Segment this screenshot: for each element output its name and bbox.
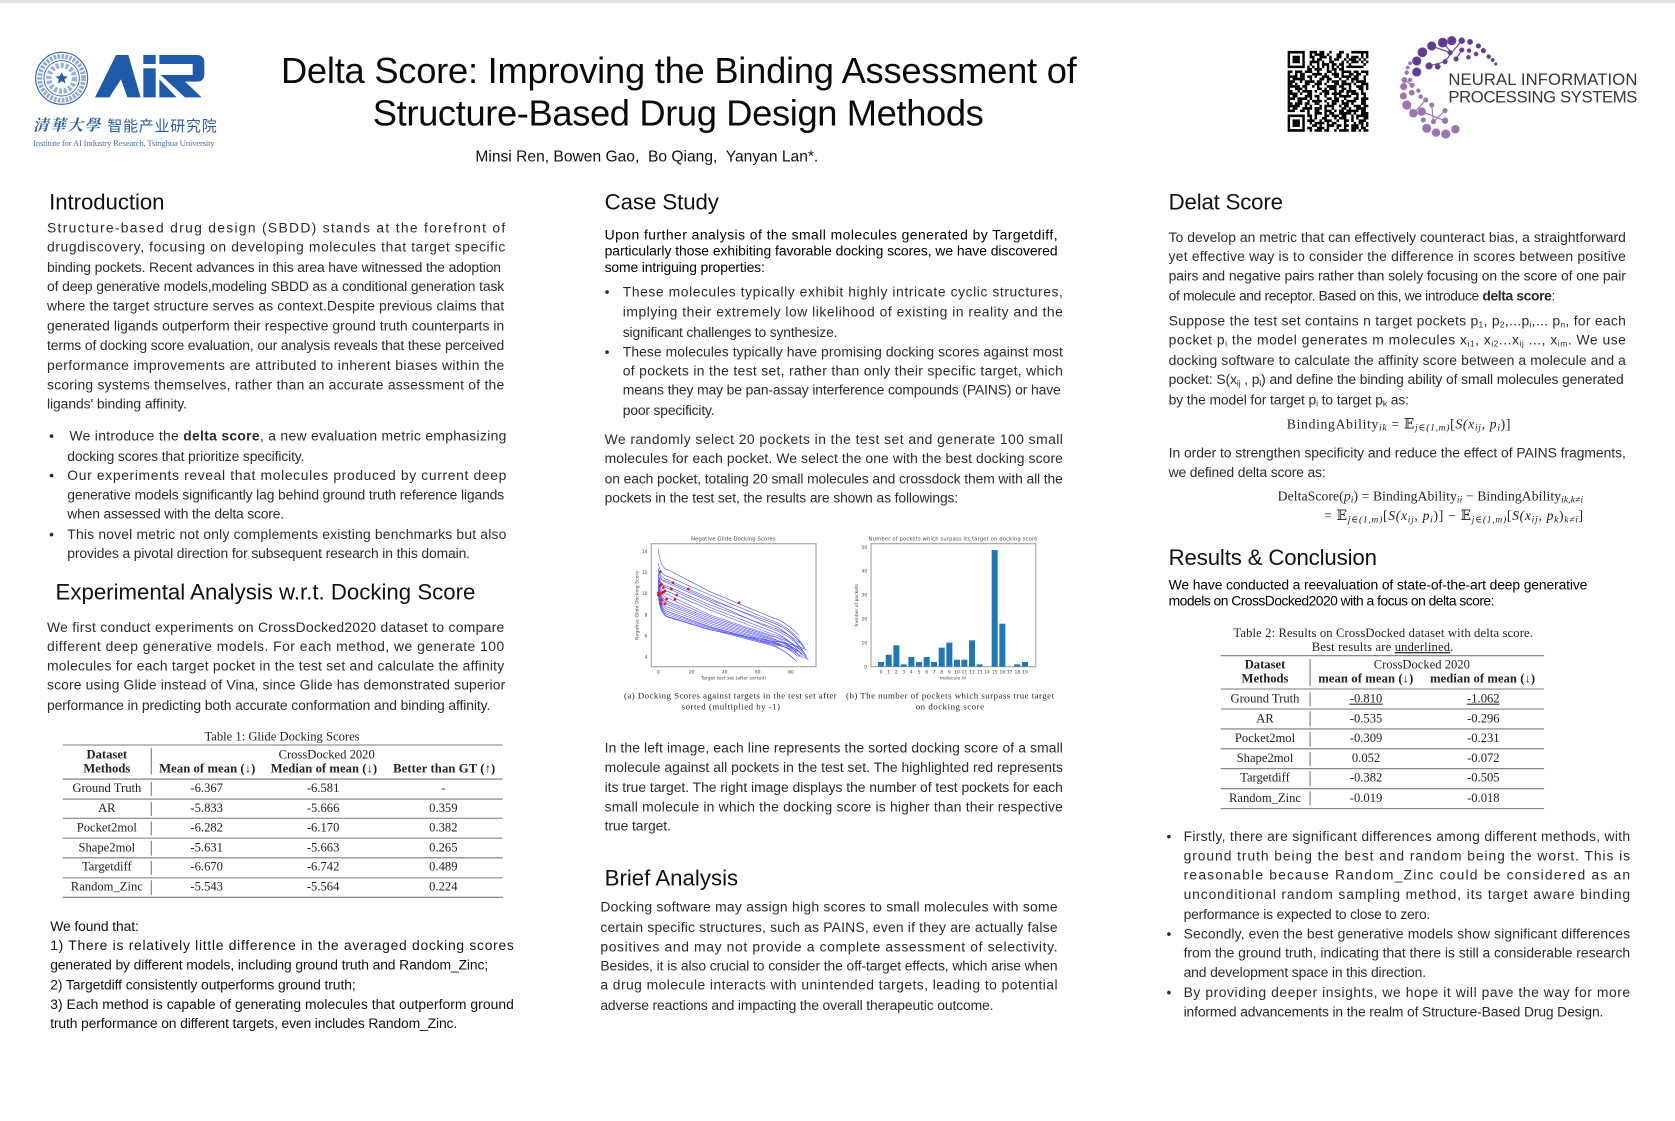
text block: introduction paragraph: binding pockets. Recent advances in this area have witnessed the adoption: [47, 259, 501, 275]
text block: problem definition: ij: [1237, 378, 1241, 388]
text block: findings: 3) Each method is capable of generating molecules that outperform ground: [50, 996, 514, 1012]
line chart: negative glide docking scores: Negative Glide Docking Scores: [691, 537, 776, 543]
text block: problem definition: ...x: [1499, 332, 1519, 348]
formula: delta score: ik,k≠i: [1561, 495, 1583, 506]
table 2: delta score results: mean of mean (↓): [1318, 672, 1413, 686]
bullet list: conclusions: •: [1167, 984, 1172, 1000]
table 1: glide docking scores: 0.359: [429, 801, 457, 815]
bullet list: conclusions: Secondly, even the best generative models show significant differences: [1184, 925, 1630, 941]
bullet list: contributions: generative models significantly lag behind ground truth reference ligands: [67, 486, 504, 502]
panel: experimental analysis: [47, 579, 514, 1031]
text block: brief analysis: adverse reactions and impacting the overall therapeutic outcome.: [600, 997, 993, 1013]
line chart: negative glide docking scores: 14: [642, 549, 648, 555]
heading: delta score: Delat Score: [1169, 189, 1283, 214]
bar chart: pockets surpassing target: 10: [954, 670, 960, 676]
bullet list: contributions: This novel metric not only complements existing benchmarks but also: [67, 526, 507, 542]
line chart: negative glide docking scores: 4: [645, 654, 648, 660]
bullet list: conclusions: reasonable because Random_Zinc could be considered as an: [1184, 867, 1630, 883]
formula: binding ability: , p: [1482, 416, 1497, 431]
table 1: glide docking scores: 0.382: [429, 821, 457, 835]
bullet list: molecule properties: implying their extremely low likelihood of existing in reality and the: [623, 304, 1063, 320]
text block: problem definition: 1: [1479, 319, 1484, 329]
table 1: glide docking scores: 0.489: [429, 860, 457, 874]
bullet list: contributions: [49, 428, 507, 561]
bar chart: pockets surpassing target: 3: [902, 670, 905, 676]
text block: problem definition: n: [1560, 319, 1565, 329]
text block: results lead: [1169, 577, 1588, 609]
table 1 caption: Table 1: Glide Docking Scores: [204, 729, 360, 743]
text block: introduction paragraph: of deep generative models,modeling SBDD as a conditional generation task: [47, 278, 504, 294]
formula: delta score: [: [1507, 508, 1512, 523]
text block: findings: 2) Targetdiff consistently outperforms ground truth;: [50, 977, 356, 993]
table 2: delta score results: CrossDocked 2020: [1374, 658, 1470, 672]
text block: delta score motivation: of molecule and receptor. Based on this, we introduce delta score:: [1169, 288, 1555, 304]
text block: findings: 1) There is relatively little difference in the averaged docking scores: [50, 937, 514, 953]
table 1: glide docking scores: -5.833: [190, 801, 223, 815]
line chart: negative glide docking scores: 6: [645, 633, 648, 639]
table 1: glide docking scores: -5.663: [307, 840, 339, 854]
heading: introduction: Introduction: [49, 189, 165, 214]
bar chart: pockets surpassing target: molecule id: [940, 676, 966, 682]
table 2: delta score results: Random_Zinc: [1229, 791, 1301, 805]
text block: delta score intro: In order to strengthen specificity and reduce the effect of PAINS fragments,: [1169, 445, 1626, 461]
formula: delta score: k: [1554, 514, 1559, 525]
bullet list: contributions: docking scores that prioritize specificity.: [67, 448, 304, 464]
chinese institute name: 智能产业研究院: [107, 117, 217, 135]
bar chart: pockets surpassing target: 10: [861, 640, 867, 646]
text block: problem definition: , p: [1484, 312, 1500, 328]
text block: introduction paragraph: drugdiscovery, focusing on developing molecules that target specific: [47, 239, 505, 255]
bullet list: conclusions: informed advancements in the realm of Structure-Based Drug Design.: [1184, 1003, 1603, 1019]
table 1: glide docking scores: Targetdiff: [82, 860, 132, 874]
title: [281, 50, 1078, 134]
text block: problem definition: ,... p: [1532, 312, 1560, 328]
table 2: delta score results: Ground Truth: [1231, 691, 1300, 705]
text block: figure explanation: its true target. The right image displays the number of test pockets for each: [605, 779, 1063, 795]
table 1: glide docking scores: 0.265: [429, 840, 457, 854]
bullet list: conclusions: and development space in this direction.: [1184, 964, 1426, 980]
formula: binding ability: )]: [1501, 416, 1510, 432]
table 2: delta score results: Methods: [1242, 672, 1289, 686]
figure captions: (a) Docking Scores against targets in the test set after: [624, 690, 837, 700]
figure captions: on docking score: [916, 702, 984, 712]
text block: introduction paragraph: scoring systems themselves, rather than an accurate assessment of the: [47, 376, 504, 392]
table 2: delta score results: -0.382: [1350, 771, 1382, 785]
bar chart: pockets surpassing target: 11: [961, 670, 967, 676]
bar chart: pockets surpassing target: 30: [861, 593, 867, 599]
text block: method description: on each pocket, totaling 20 small molecules and crossdock them with all the: [605, 470, 1063, 486]
panel: delta score: [1168, 189, 1626, 525]
table 1: glide docking scores: -6.742: [307, 860, 339, 874]
title: Structure-Based Drug Design Methods: [373, 93, 984, 134]
text block: introduction paragraph: terms of docking score evaluation, our analysis reveals that these perceived: [47, 337, 504, 353]
formula: delta score: S(x: [1388, 508, 1407, 524]
chinese institute name: 清華大學: [33, 113, 102, 135]
bullet list: molecule properties: These molecules typically exhibit highly intricate cyclic structures,: [623, 283, 1063, 299]
bar chart: pockets surpassing target: 12: [969, 670, 975, 676]
bar chart: pockets surpassing target: 18: [1014, 670, 1020, 676]
bullet list: molecule properties: •: [605, 343, 610, 359]
bar chart: pockets surpassing target: 0: [880, 670, 883, 676]
text block: results lead: We have conducted a reevaluation of state-of-the-art deep generative: [1169, 577, 1588, 593]
title: Delta Score: Improving the Binding Assessment of: [281, 50, 1078, 91]
text block: problem definition: pocket: S(x: [1169, 371, 1237, 387]
panel: case study: [605, 189, 1063, 834]
table 1: glide docking scores: AR: [98, 801, 116, 815]
text block: problem definition: pocket p: [1169, 332, 1225, 348]
formula: delta score: i: [1430, 514, 1433, 525]
text block: findings: generated by different models, including ground truth and Random_Zinc;: [50, 956, 488, 972]
text block: problem definition: , for each: [1565, 312, 1626, 328]
bar chart: pockets surpassing target: 16: [999, 670, 1005, 676]
icon: purple dots arc: [1413, 37, 1497, 76]
table 2: delta score results: -0.309: [1350, 731, 1382, 745]
line chart: negative glide docking scores: 40: [722, 670, 728, 676]
formula: binding ability: i: [1497, 422, 1500, 433]
table 2: delta score results: -0.072: [1467, 751, 1500, 765]
bar chart: pockets surpassing target: 13: [977, 670, 983, 676]
bullet list: conclusions: from the ground truth, indicating that there is still a considerable research: [1184, 945, 1630, 961]
text block: experiment description: performance in predicting both accurate conformation and binding affinity.: [47, 697, 490, 713]
QR code: [1288, 52, 1368, 130]
text block: brief analysis: positives and may not provide a complete assessment of selectivity.: [600, 938, 1058, 954]
table 1: glide docking scores: CrossDocked 2020: [279, 747, 375, 761]
text block: case study lead: particularly those exhibiting favorable docking scores, we have discovered: [605, 242, 1058, 258]
logo: AIR Tsinghua institute: [33, 52, 217, 148]
table 1: glide docking scores: -6.670: [190, 860, 223, 874]
line chart: negative glide docking scores: 80: [788, 670, 794, 676]
text block: case study lead: some intriguing properties:: [605, 259, 765, 275]
bar chart: pockets surpassing target: 9: [948, 670, 951, 676]
text block: problem definition: i: [1529, 319, 1531, 329]
table 2: delta score results: Dataset: [1245, 658, 1286, 672]
bullet list: contributions: •: [49, 526, 54, 542]
heading: experimental analysis: Experimental Analysis w.r.t. Docking Score: [56, 579, 475, 604]
table 2: delta score results: 0.052: [1352, 751, 1380, 765]
panel: brief analysis: [600, 866, 1058, 1013]
text block: problem definition: to target p: [1318, 391, 1383, 407]
text block: experiment description: score using Glide instead of Vina, since Glide has demonstrated superior: [47, 677, 506, 693]
bullet list: contributions: •: [49, 428, 54, 444]
formula: delta score: ]: [1579, 508, 1583, 523]
authors: Minsi Ren, Bowen Gao, Bo Qiang, Yanyan Lan*.: [475, 148, 818, 165]
bullet list: contributions: provides a pivotal direction for subsequent research in this domain.: [67, 545, 470, 561]
table 2 caption: Table 2: Results on CrossDocked dataset with delta score.: [1233, 626, 1533, 640]
table 1: glide docking scores: 0.224: [429, 879, 458, 893]
text block: introduction paragraph: generated ligands outperform their respective ground truth counterparts in: [47, 318, 504, 334]
logo: Neural Information Processing Systems: [1400, 37, 1637, 138]
bullet list: molecule properties: These molecules typically have promising docking scores against most: [623, 343, 1063, 359]
bar chart: pockets surpassing target: 19: [1022, 670, 1028, 676]
text block: problem definition: , x: [1475, 332, 1491, 348]
formula: binding ability: j∈(1,m): [1413, 422, 1449, 433]
heading: brief analysis: Brief Analysis: [605, 866, 738, 891]
formula: delta score: ij: [1532, 514, 1538, 525]
text block: introduction paragraph: ligands' binding affinity.: [47, 396, 187, 412]
table 1: glide docking scores: -6.170: [307, 821, 339, 835]
formula: delta score: ) = BindingAbility: [1354, 488, 1457, 504]
bar chart: pockets surpassing target: 20: [861, 616, 867, 622]
text block: problem definition: as:: [1387, 391, 1409, 407]
text block: method description: [605, 431, 1063, 506]
bullet list: conclusions: ground truth being the best and random being the worst. This is: [1184, 847, 1630, 863]
text block: problem definition: i: [1259, 378, 1261, 388]
line chart: negative glide docking scores: 12: [642, 570, 648, 576]
text block: method description: molecules for each pocket. We select the one with the best docking score: [605, 450, 1063, 466]
table 1: glide docking scores: [63, 729, 503, 897]
formula: binding ability: = 𝔼: [1387, 416, 1414, 431]
bar chart: pockets surpassing target: [854, 537, 1037, 682]
formula: delta score: , p: [1414, 508, 1430, 523]
panel: results and conclusion: [1167, 545, 1630, 1019]
bullet list: conclusions: performance is expected to close to zero.: [1184, 906, 1430, 922]
text block: results lead: models on CrossDocked2020 with a focus on delta score:: [1169, 593, 1494, 609]
table 1: glide docking scores: Better than GT (↑): [393, 761, 495, 775]
table 2: delta score results: -0.018: [1467, 791, 1500, 805]
table 1: glide docking scores: -6.581: [307, 781, 339, 795]
icon: Tsinghua seal: [36, 52, 88, 104]
text block: experiment description: [47, 619, 506, 713]
text block: problem definition: i2: [1491, 339, 1499, 349]
bullet list: molecule properties: •: [605, 283, 610, 299]
table 2: delta score results: -0.810: [1350, 691, 1382, 705]
bar chart: pockets surpassing target: Number of pockets which surpass its target on docking score: [869, 537, 1037, 543]
bar chart: pockets surpassing target: 6: [925, 670, 928, 676]
bullet list: molecule properties: means they may be pan-assay interference compounds (PAINS) or have: [623, 382, 1061, 398]
table 1: glide docking scores: -5.543: [190, 879, 223, 893]
bullet list: contributions: •: [49, 467, 54, 483]
text block: delta score motivation: pairs and negative pairs rather than solely focusing on the score of one pair: [1169, 267, 1626, 283]
formula: delta score: − BindingAbility: [1462, 488, 1561, 503]
bullet list: conclusions: [1167, 828, 1630, 1019]
bullet list: molecule properties: poor specificity.: [623, 402, 715, 418]
text block: problem definition: i: [1316, 398, 1318, 408]
table 2: delta score results: -0.505: [1467, 771, 1500, 785]
bullet list: conclusions: Firstly, there are significant differences among different methods, with: [1184, 828, 1630, 844]
table 2 caption: [1233, 626, 1533, 654]
formula: delta score: , p: [1538, 508, 1554, 523]
text block: figure explanation: small molecule in which the docking score is higher than their respective: [605, 798, 1063, 814]
text block: delta score motivation: [1169, 229, 1626, 304]
bullet list: conclusions: By providing deeper insights, we hope it will pave the way for more: [1184, 984, 1630, 1000]
text block: figure explanation: [605, 740, 1063, 834]
text block: problem definition: ) and define the binding ability of small molecules generated: [1261, 371, 1624, 387]
bullet list: conclusions: unconditional random sampling method, its target aware binding: [1184, 886, 1630, 902]
table 1: glide docking scores: Dataset: [87, 747, 128, 761]
text block: brief analysis: certain specific structures, such as PAINS, even if they are actually false: [600, 919, 1058, 935]
bar chart: pockets surpassing target: 8: [940, 670, 943, 676]
formula: delta score: [: [1383, 508, 1388, 523]
table 1: glide docking scores: Ground Truth: [72, 781, 142, 795]
charts figure: [624, 537, 1055, 712]
line chart: negative glide docking scores: 0: [657, 670, 660, 676]
bullet list: conclusions: •: [1167, 828, 1172, 844]
table 1: glide docking scores: -5.564: [307, 879, 340, 893]
heading: results and conclusion: Results & Conclusion: [1169, 545, 1377, 570]
table 2: delta score results: median of mean (↓): [1430, 672, 1535, 686]
formula: binding ability: ik: [1379, 422, 1387, 433]
bar chart: pockets surpassing target: 0: [864, 664, 867, 670]
panel: introduction: [46, 189, 507, 561]
formula: delta score: = 𝔼: [1324, 508, 1347, 523]
text block: problem definition: 2: [1500, 319, 1505, 329]
line chart: negative glide docking scores: [634, 537, 816, 682]
text block: problem definition: i1: [1467, 339, 1475, 349]
table 2: delta score results: Pocket2mol: [1235, 731, 1296, 745]
table 2 caption: Best results are underlined.: [1312, 640, 1453, 654]
table 2: delta score results: Shape2mol: [1237, 751, 1294, 765]
bar chart: pockets surpassing target: 15: [992, 670, 998, 676]
table 2: delta score results: Targetdiff: [1240, 771, 1291, 785]
text block: delta score intro: [1168, 445, 1626, 480]
text block: case study lead: [605, 226, 1058, 275]
table 2: delta score results: -0.019: [1350, 791, 1382, 805]
formula: delta score: ): [1559, 508, 1564, 524]
text block: case study lead: Upon further analysis of the small molecules generated by Targetdiff,: [605, 226, 1058, 242]
text block: problem definition: the model generates m molecules x: [1228, 332, 1467, 348]
formula: delta score: j∈(1,m): [1470, 514, 1506, 525]
bar chart: pockets surpassing target: 4: [910, 670, 913, 676]
text block: figure explanation: molecule against all pockets in the test set. The highlighted red represents: [605, 759, 1063, 775]
text block: experiment description: different deep generative models. For each method, we generate 100: [47, 638, 504, 654]
text block: problem definition: docking software to calculate the affinity score between a molecule and a: [1169, 352, 1626, 368]
text block: method description: We randomly select 20 pockets in the test set and generate 100 small: [605, 431, 1063, 447]
table 1: glide docking scores: Pocket2mol: [77, 821, 137, 835]
table 1: glide docking scores: -6.367: [190, 781, 223, 795]
text block: findings: truth performance on different targets, even includes Random_Zinc.: [50, 1015, 457, 1031]
bullet list: contributions: Our experiments reveal that molecules produced by current deep: [67, 467, 507, 483]
bar chart: pockets surpassing target: 2: [895, 670, 898, 676]
text block: problem definition: im: [1558, 339, 1567, 349]
line chart: negative glide docking scores: Target test set (after sorted): [700, 676, 766, 682]
bullet list: molecule properties: of pockets in the test set, rather than only their specific target, which: [623, 362, 1063, 378]
bar chart: pockets surpassing target: 17: [1007, 670, 1013, 676]
table 1: glide docking scores: Median of mean (↓): [271, 761, 377, 775]
line chart: negative glide docking scores: 8: [645, 612, 648, 618]
bar chart: pockets surpassing target: 5: [918, 670, 921, 676]
table 1: glide docking scores: -: [441, 781, 445, 795]
line chart: negative glide docking scores: 10: [642, 591, 648, 597]
formula: delta score: ij: [1408, 514, 1414, 525]
text block: problem definition: i: [1225, 339, 1227, 349]
text block: brief analysis: a drug molecule interacts with unintended targets, leading to potential: [600, 977, 1058, 993]
bar chart: pockets surpassing target: 40: [861, 569, 867, 575]
table 2: delta score results: -0.535: [1350, 711, 1382, 725]
table 1: glide docking scores: Shape2mol: [78, 840, 136, 854]
text block: problem definition: . We use: [1568, 332, 1626, 348]
bullet list: molecule properties: significant challenges to synthesize.: [623, 324, 837, 340]
formula: binding ability: ij: [1475, 422, 1481, 433]
text block: delta score motivation: yet effective way is to consider the difference in scores between positive: [1169, 248, 1626, 264]
text block: brief analysis: [600, 899, 1058, 1013]
text block: findings: [50, 918, 514, 1031]
formula: delta score: )] − 𝔼: [1434, 508, 1471, 524]
table 2: delta score results: -0.231: [1467, 731, 1500, 745]
bar chart: pockets surpassing target: Number of pockets: [854, 583, 860, 627]
line chart: negative glide docking scores: 20: [689, 670, 695, 676]
table 1: glide docking scores: Mean of mean (↓): [159, 761, 255, 775]
text block: problem definition: ..., x: [1524, 332, 1557, 348]
formula: delta score: [1278, 488, 1583, 525]
line chart: negative glide docking scores: Negative Glide Docking Score: [634, 571, 640, 640]
formula: delta score: k≠i: [1564, 514, 1578, 525]
text block: brief analysis: Docking software may assign high scores to small molecules with some: [600, 899, 1058, 915]
text block: experiment description: molecules for each target pocket in the test set and calculate the affinity: [47, 657, 504, 673]
text block: problem definition: [1169, 312, 1626, 408]
formula: binding ability: S(x: [1455, 416, 1474, 432]
neurips wordmark: NEURAL INFORMATION: [1448, 70, 1637, 89]
text block: problem definition: k: [1383, 398, 1388, 408]
text block: problem definition: by the model for target p: [1169, 391, 1316, 407]
text block: introduction paragraph: performance improvements are attributed to inherent biases within the: [47, 357, 504, 373]
bar chart: pockets surpassing target: 50: [861, 545, 867, 551]
formula: delta score: i: [1351, 495, 1354, 506]
text block: introduction paragraph: Structure-based drug design (SBDD) stands at the forefront of: [47, 219, 505, 235]
table 2: delta score results: -0.296: [1467, 711, 1500, 725]
text block: findings: We found that:: [50, 918, 139, 934]
chinese institute name: [33, 113, 217, 135]
table 1: glide docking scores: -6.282: [190, 821, 223, 835]
table 2: delta score results: AR: [1256, 711, 1274, 725]
text block: experiment description: We first conduct experiments on CrossDocked2020 dataset to compare: [47, 619, 504, 635]
formula: delta score: j∈(1,m): [1346, 514, 1382, 525]
text block: problem definition: Suppose the test set contains n target pockets p: [1169, 312, 1478, 328]
table 1: glide docking scores: -5.631: [190, 840, 223, 854]
bar chart: pockets surpassing target: 1: [887, 670, 890, 676]
formula: delta score: S(x: [1512, 508, 1531, 524]
neurips wordmark: PROCESSING SYSTEMS: [1448, 87, 1637, 106]
text block: problem definition: ij: [1519, 339, 1524, 349]
heading: case study: Case Study: [605, 189, 720, 214]
bullet list: conclusions: •: [1167, 925, 1172, 941]
table 2: delta score results: -1.062: [1467, 691, 1500, 705]
line chart: negative glide docking scores: 60: [755, 670, 761, 676]
neurips wordmark: [1448, 70, 1637, 106]
table 1: glide docking scores: Methods: [83, 761, 130, 775]
text block: figure explanation: In the left image, each line represents the sorted docking score of a small: [605, 740, 1063, 756]
table 1: glide docking scores: Random_Zinc: [71, 879, 143, 893]
table 1: glide docking scores: -5.666: [307, 801, 339, 815]
formula: binding ability: BindingAbility: [1287, 416, 1378, 431]
figure captions: (b) The number of pockets which surpass true target: [846, 690, 1055, 700]
text block: problem definition: ,...p: [1505, 312, 1529, 328]
figure captions: [624, 690, 1055, 712]
bar chart: pockets surpassing target: 7: [933, 670, 936, 676]
table 2: delta score results: [1221, 626, 1544, 809]
text block: problem definition: , p: [1241, 371, 1260, 387]
text block: introduction paragraph: [46, 219, 505, 412]
text block: method description: pockets in the test set, the results are shown as followings:: [605, 490, 958, 506]
figure captions: sorted (multiplied by -1): [682, 702, 780, 712]
text block: introduction paragraph: where the target structure serves as context.Despite previous claims that: [46, 297, 504, 313]
bullet list: contributions: We introduce the delta score, a new evaluation metric emphasizing: [69, 428, 506, 444]
formula: delta score: ii: [1457, 495, 1463, 506]
bar chart: pockets surpassing target: 14: [984, 670, 990, 676]
bullet list: molecule properties: [605, 283, 1063, 418]
formula: binding ability: [: [1450, 416, 1455, 431]
text block: delta score intro: we defined delta score as:: [1168, 464, 1326, 480]
icon: AIR wordmark: [95, 55, 204, 97]
text block: figure explanation: true target.: [605, 818, 671, 834]
text block: brief analysis: Besides, it is also crucial to consider the off-target effects, which arise when: [600, 957, 1058, 973]
formula: delta score: DeltaScore(p: [1278, 488, 1351, 503]
bullet list: contributions: when assessed with the delta score.: [66, 506, 284, 522]
english institute name: Institute for AI Industry Research, Tsinghua University: [33, 138, 215, 148]
text block: delta score motivation: To develop an metric that can effectively counteract bias, a straightforward: [1169, 229, 1626, 245]
